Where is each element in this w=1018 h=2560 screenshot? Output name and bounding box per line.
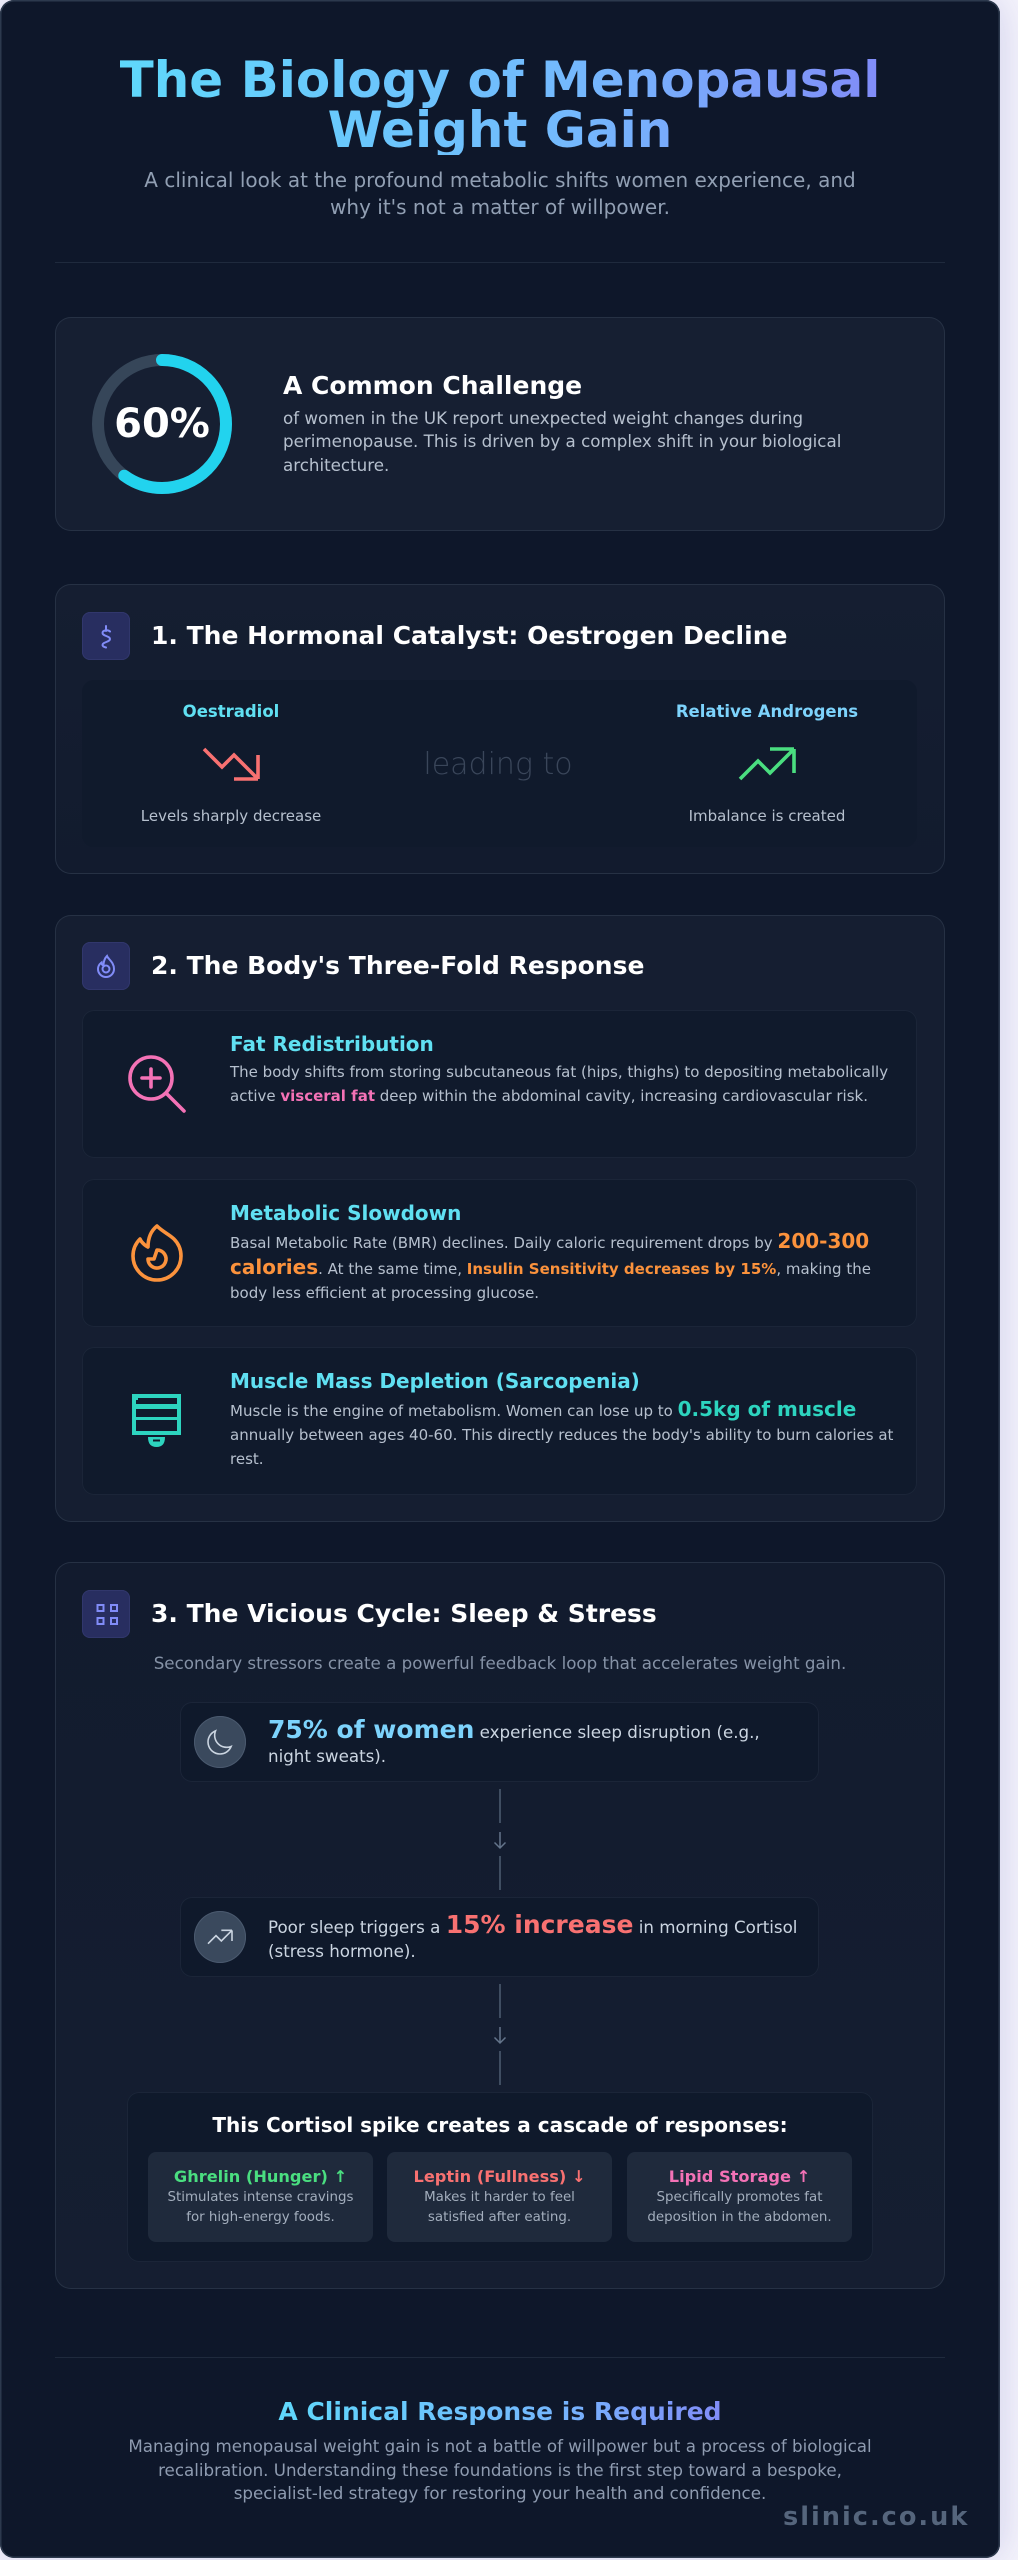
icon: magnifier plus xyxy=(128,1055,186,1113)
subtitle xyxy=(144,168,856,219)
box title: Ghrelin (Hunger) ↑ xyxy=(174,2167,347,2186)
footer text: recalibration. Understanding these foundations is the first step toward a bespoke, xyxy=(158,2460,842,2480)
step text: Poor sleep triggers a 15% increase in morning Cortisol xyxy=(268,1910,797,1938)
text: common challenge description: of women in the UK report unexpected weight changes during xyxy=(283,408,803,428)
card text xyxy=(230,1063,888,1105)
card text xyxy=(230,1397,894,1468)
icon: trending up xyxy=(738,747,796,780)
card: fat redistribution xyxy=(82,1010,917,1158)
heading: section 2: 2. The Body's Three-Fold Response xyxy=(151,951,644,980)
icon: trending up xyxy=(194,1911,246,1963)
card text: rest. xyxy=(230,1450,264,1468)
box text xyxy=(647,2190,832,2225)
footer heading: A Clinical Response is Required xyxy=(278,2397,722,2426)
text: common challenge description: architecture. xyxy=(283,455,389,475)
footer text xyxy=(128,2436,872,2503)
caption: imbalance is created: Imbalance is created xyxy=(689,807,845,825)
caption: levels sharply decrease: Levels sharply decrease xyxy=(141,807,321,825)
box title: Leptin (Fullness) ↓ xyxy=(414,2167,585,2186)
card text: active visceral fat deep within the abdominal cavity, increasing cardiovascular risk. xyxy=(230,1087,868,1105)
box text: Specifically promotes fat xyxy=(656,2190,822,2205)
card text: Basal Metabolic Rate (BMR) declines. Daily caloric requirement drops by 200-300 xyxy=(230,1229,869,1253)
box: lipid storage xyxy=(627,2152,852,2242)
icon: muscle layers xyxy=(132,1394,181,1447)
text: common challenge description: perimenopause. This is driven by a complex shift in your biological xyxy=(283,431,841,451)
card title: Fat Redistribution xyxy=(230,1032,434,1056)
card text: calories. At the same time, Insulin Sensitivity decreases by 15%, making the xyxy=(230,1255,871,1279)
footer text: specialist-led strategy for restoring your health and confidence. xyxy=(234,2483,766,2503)
box text: satisfied after eating. xyxy=(428,2210,571,2225)
box text: Makes it harder to feel xyxy=(424,2190,575,2205)
step text: (stress hormone). xyxy=(268,1940,416,1960)
watermark: slinic.co.uk xyxy=(783,2502,969,2532)
panel: 2. three-fold response xyxy=(55,915,945,1522)
hormone comparison panel xyxy=(82,680,917,847)
footer text: Managing menopausal weight gain is not a battle of willpower but a process of biological xyxy=(128,2436,872,2456)
icon: flame xyxy=(82,942,130,990)
text: leading to: leading to xyxy=(423,747,573,782)
title: Weight Gain xyxy=(328,101,672,159)
subtitle: why it's not a matter of willpower. xyxy=(330,195,670,219)
box: leptin xyxy=(387,2152,612,2242)
card title: Muscle Mass Depletion (Sarcopenia) xyxy=(230,1368,640,1392)
heading: a common challenge: A Common Challenge xyxy=(283,370,582,400)
icon: moon xyxy=(194,1716,246,1768)
panel: 3. the vicious cycle xyxy=(55,1562,945,2289)
section intro text: Secondary stressors create a powerful feedback loop that accelerates weight gain. xyxy=(154,1653,846,1673)
card title: Metabolic Slowdown xyxy=(230,1200,461,1224)
card: muscle mass depletion xyxy=(82,1347,917,1495)
box title: Lipid Storage ↑ xyxy=(669,2167,810,2186)
column: relative androgens xyxy=(676,702,858,825)
card: metabolic slowdown xyxy=(82,1179,917,1327)
text: common challenge description xyxy=(283,408,841,475)
card text xyxy=(230,1229,871,1302)
box: ghrelin xyxy=(148,2152,373,2242)
box text: Stimulates intense cravings xyxy=(168,2190,354,2205)
column: oestradiol xyxy=(141,702,321,825)
label: oestradiol: Oestradiol xyxy=(183,702,279,721)
cascade heading: This Cortisol spike creates a cascade of responses: xyxy=(212,2113,788,2137)
card text: annually between ages 40-60. This directly reduces the body's ability to burn calories at xyxy=(230,1426,893,1444)
box text xyxy=(168,2190,354,2225)
panel: a common challenge xyxy=(55,317,945,531)
donut value: 60% xyxy=(114,401,210,447)
panel: cortisol cascade xyxy=(127,2092,873,2262)
icon: dna squiggle xyxy=(82,612,130,660)
step text xyxy=(268,1714,760,1766)
donut chart: 60% xyxy=(92,354,232,494)
heading: section 1: 1. The Hormonal Catalyst: Oestrogen Decline xyxy=(151,621,787,650)
card text: The body shifts from storing subcutaneous fat (hips, thighs) to depositing metabolically xyxy=(230,1063,888,1081)
arrow: down 2 xyxy=(494,1984,506,2085)
heading: section 3: 3. The Vicious Cycle: Sleep & Stress xyxy=(151,1599,657,1628)
icon: trending down xyxy=(202,748,260,781)
step text: night sweats). xyxy=(268,1746,386,1766)
box text: deposition in the abdomen. xyxy=(647,2210,832,2225)
card text: body less efficient at processing glucose. xyxy=(230,1284,539,1302)
title xyxy=(120,51,880,159)
box text xyxy=(424,2190,575,2225)
title: The Biology of Menopausal xyxy=(120,51,880,109)
subtitle: A clinical look at the profound metabolic shifts women experience, and xyxy=(144,168,856,192)
arrow: down 1 xyxy=(494,1789,506,1890)
box text: for high-energy foods. xyxy=(186,2210,335,2225)
step: sleep disruption xyxy=(180,1702,819,1782)
icon: four squares xyxy=(82,1590,130,1638)
step text: 75% of women experience sleep disruption (e.g., xyxy=(268,1714,760,1744)
label: relative androgens: Relative Androgens xyxy=(676,702,858,721)
icon: fire xyxy=(131,1224,183,1282)
panel: 1. the hormonal catalyst xyxy=(55,584,945,874)
step: cortisol increase xyxy=(180,1897,819,1977)
card text: Muscle is the engine of metabolism. Women can lose up to 0.5kg of muscle xyxy=(230,1397,856,1421)
step text xyxy=(268,1910,797,1960)
